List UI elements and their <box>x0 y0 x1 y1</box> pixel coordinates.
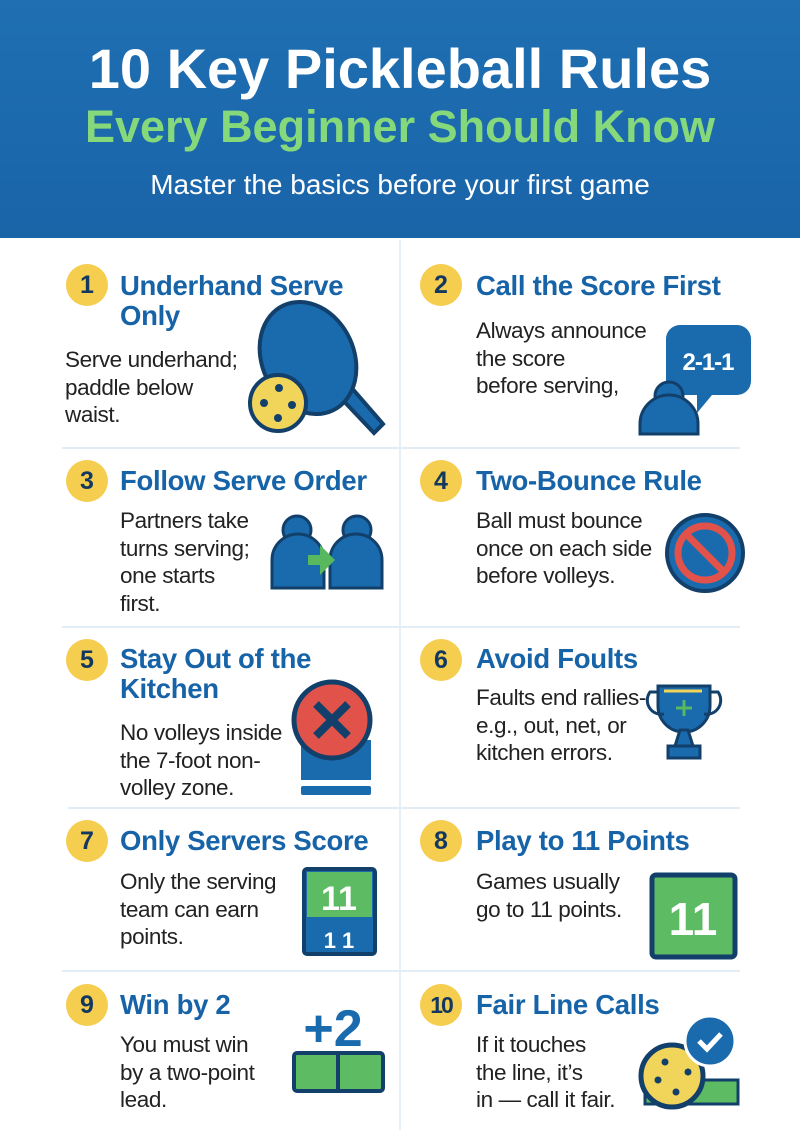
icon: 11 board <box>652 875 735 957</box>
icon: +2 <box>294 1000 383 1091</box>
icon: trophy <box>647 686 721 758</box>
text: 6 <box>434 646 448 674</box>
text: before serving, <box>476 373 619 398</box>
text: Play to 11 Points <box>476 825 689 856</box>
text: once on each side <box>476 536 652 560</box>
icon: speech bubble with score: 2-1-1 <box>682 349 734 376</box>
icon: scoreboard 11/11: 11 <box>321 880 357 918</box>
text: in — call it fair. <box>476 1087 615 1112</box>
text: turns serving; <box>120 536 249 560</box>
tagline: Master the basics before your first game <box>150 169 650 200</box>
icon: scoreboard 11/11 <box>304 869 375 954</box>
header <box>0 0 800 238</box>
text: Kitchen <box>120 673 219 704</box>
text: before volleys. <box>476 563 615 588</box>
rule 1 <box>65 264 343 427</box>
icon: 11 board: 11 <box>669 893 717 945</box>
text: 7 <box>80 827 94 855</box>
text: waist. <box>65 402 120 427</box>
text: No volleys inside <box>120 720 282 745</box>
text: 5 <box>80 646 94 674</box>
text: Games usually <box>476 869 620 894</box>
text: You must win <box>120 1032 248 1057</box>
text: 9 <box>80 991 94 1019</box>
icon: scoreboard 11/11: 1 1 <box>324 928 354 953</box>
text: volley zone. <box>120 775 234 800</box>
text: Call the Score First <box>476 270 721 301</box>
text: Serve underhand; <box>65 347 237 372</box>
icon: kitchen X <box>294 682 371 795</box>
text: Ball must bounce <box>476 508 642 533</box>
text: the line, it’s <box>476 1060 583 1084</box>
rule 3 <box>66 460 367 616</box>
text: 2 <box>434 271 448 299</box>
icon: no sign <box>667 515 743 591</box>
text: Faults end rallies- <box>476 685 646 710</box>
text: Two-Bounce Rule <box>476 465 702 496</box>
text: go to 11 points. <box>476 896 622 922</box>
text: first. <box>120 590 160 616</box>
text: e.g., out, net, or <box>476 712 626 738</box>
text: kitchen errors. <box>476 740 613 765</box>
text: by a two-point <box>120 1060 254 1084</box>
text: 10 <box>430 992 452 1018</box>
rule 10 <box>420 984 659 1112</box>
rule 7 <box>66 820 368 949</box>
text: points. <box>120 924 184 949</box>
text: lead. <box>120 1087 167 1112</box>
text: paddle below <box>65 374 193 400</box>
text: Always announce <box>476 318 646 343</box>
text: team can earn <box>120 896 259 922</box>
text: Stay Out of the <box>120 643 311 674</box>
text: Win by 2 <box>120 989 230 1020</box>
text: the 7-foot non- <box>120 748 260 772</box>
text: 8 <box>434 827 448 855</box>
text: the score <box>476 346 565 370</box>
subtitle green: Every Beginner Should Know <box>85 101 715 152</box>
rule 5 <box>66 639 311 800</box>
rule 2 <box>420 264 721 398</box>
text: Only <box>120 300 180 331</box>
text: Only Servers Score <box>120 825 368 856</box>
rule 6 <box>420 639 646 765</box>
text: Underhand Serve <box>120 270 343 301</box>
text: Only the serving <box>120 869 276 894</box>
icon: paddle and ball <box>242 286 383 433</box>
icon: +2: +2 <box>303 1000 363 1058</box>
text: 4 <box>434 467 448 495</box>
text: Fair Line Calls <box>476 989 659 1020</box>
rule 8 <box>420 820 689 922</box>
rule 4 <box>420 460 702 588</box>
rule 9 <box>66 984 255 1112</box>
text: Follow Serve Order <box>120 465 367 496</box>
text: one starts <box>120 563 215 588</box>
text: 3 <box>80 467 94 495</box>
icon: two partners with arrow <box>272 516 382 588</box>
text: Partners take <box>120 508 249 533</box>
text: If it touches <box>476 1032 586 1057</box>
text: 1 <box>80 271 94 299</box>
icon: ball on line with check <box>641 1016 738 1107</box>
title: 10 Key Pickleball Rules <box>89 37 711 100</box>
icon: speech bubble with score <box>640 325 751 434</box>
text: Avoid Foults <box>476 643 638 674</box>
